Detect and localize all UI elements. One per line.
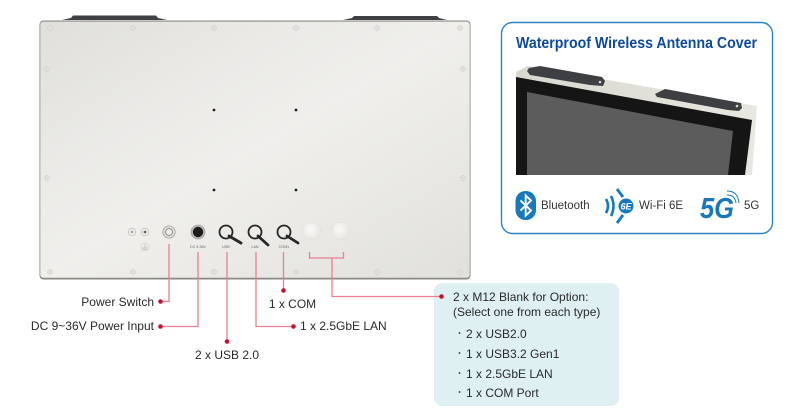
callout box: M12 options: 1 x USB3.2 Gen1: [466, 347, 560, 361]
USB M12 port with cap: USB: [222, 245, 230, 249]
label: Bluetooth: Bluetooth: [541, 200, 590, 212]
DC input port: [190, 225, 206, 249]
icon: Wi-Fi 6E: [606, 189, 634, 223]
label: COM: 1 x COM: [269, 297, 316, 311]
callout box: M12 options: [434, 283, 619, 406]
leader line: power switch: [158, 244, 169, 304]
mounting screws: [45, 26, 465, 274]
DC input port: DC 9-36V: [190, 245, 206, 249]
power switch port: [163, 226, 175, 238]
leader line: M12 blank bracket: [310, 252, 444, 299]
COM M12 port with cap: [278, 226, 298, 249]
callout box: M12 options: 2 x M12 Blank for Option:: [453, 290, 588, 304]
grounding screws: [128, 228, 149, 251]
label: DC power input: DC 9~36V Power Input: [31, 319, 155, 333]
label: Wi-Fi 6E: Wi-Fi 6E: [639, 200, 683, 212]
COM M12 port with cap: COM1: [279, 245, 289, 249]
antennas on top edge of rear panel: [62, 16, 447, 20]
label: USB: 2 x USB 2.0: [195, 348, 259, 362]
panel: wireless antenna card: [502, 22, 772, 234]
USB M12 port with cap: [220, 226, 241, 249]
callout box: M12 options: 2 x USB2.0: [466, 327, 527, 341]
callout box: M12 options: (Select one from each type): [453, 305, 600, 319]
icon: bluetooth: [516, 191, 536, 220]
blank M12 plugs: [303, 222, 350, 240]
leader line: USB: [225, 252, 229, 344]
label: Power Switch: Power Switch: [81, 295, 154, 309]
card title: Waterproof Wireless Antenna Cover: [516, 35, 757, 52]
leader line: LAN: [256, 252, 296, 329]
LAN M12 port with cap: LAN: [252, 245, 259, 249]
icon: 5G: 5G: [700, 193, 734, 225]
callout box: M12 options: 1 x 2.5GbE LAN: [466, 367, 553, 381]
icon: Wi-Fi 6E: 6E: [620, 202, 632, 212]
rear metal panel: [40, 20, 470, 280]
leader line: DC input: [158, 252, 198, 329]
label: 5G: 5G: [744, 200, 759, 212]
label: LAN: 1 x 2.5GbE LAN: [300, 319, 387, 333]
LAN M12 port with cap: [248, 226, 268, 249]
VESA holes: [213, 109, 297, 191]
callout box: M12 options: 1 x COM Port: [466, 386, 539, 400]
photo: display with antennas: [516, 66, 757, 175]
leader line: COM: [281, 252, 286, 293]
